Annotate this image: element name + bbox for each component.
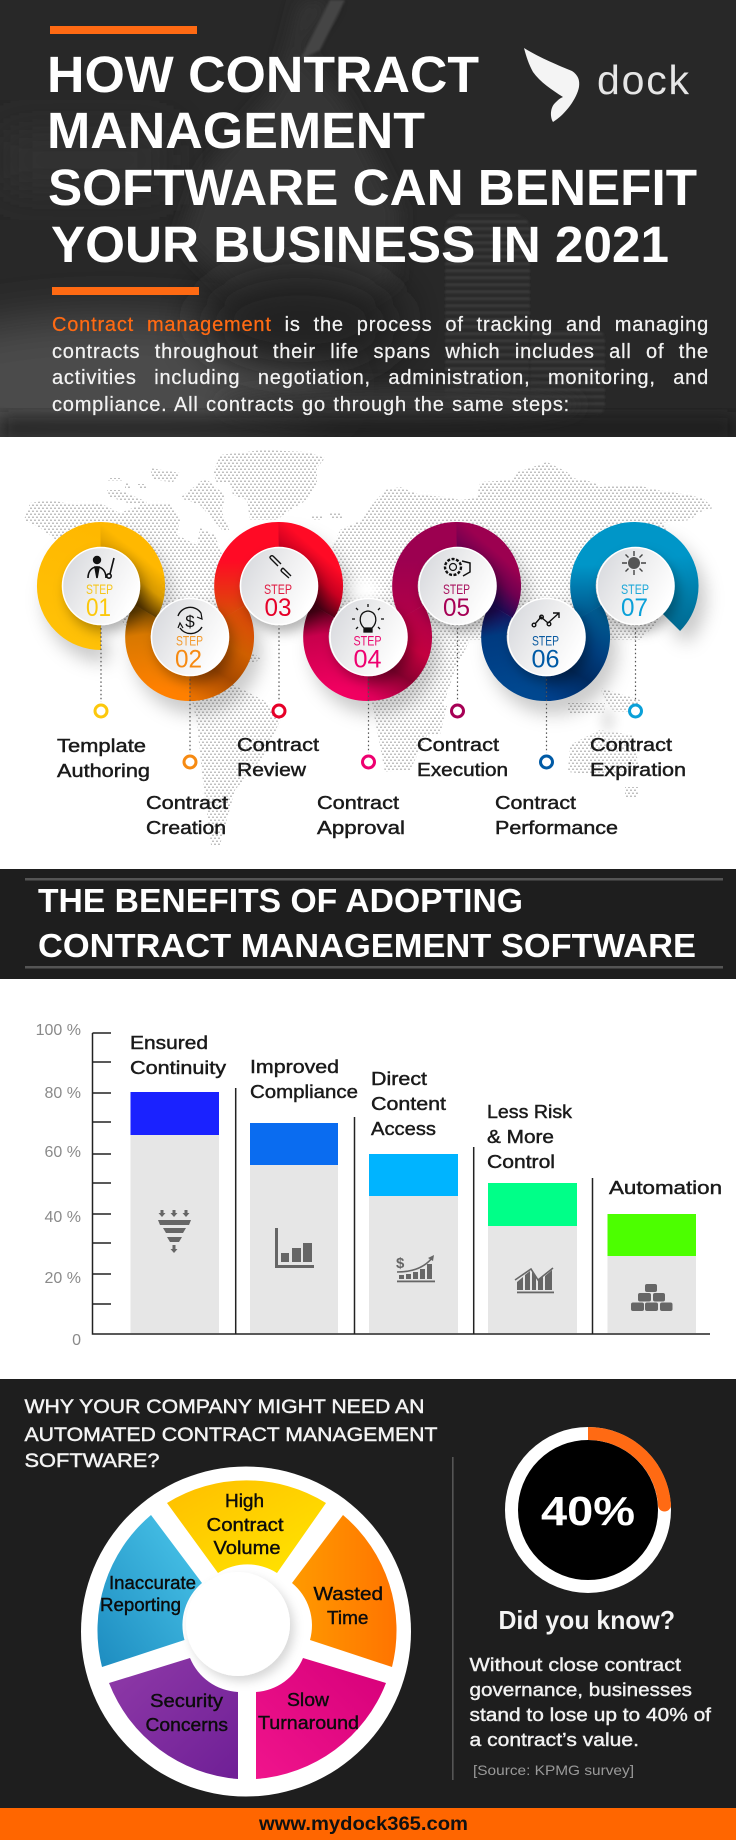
segment: wasted time [292,1515,397,1667]
title: MANAGEMENT [47,102,425,159]
icon: dollar growth: $ [396,1255,405,1272]
intro paragraph: compliance. All contracts go through the same steps: [52,394,570,416]
title: YOUR BUSINESS IN 2021 [51,216,669,273]
bar: ensured continuity: Continuity [130,1057,227,1078]
intro paragraph: Contract management is the process of tracking and managing [52,314,709,336]
step 01: STEP [86,581,113,597]
icon: funnel [158,1210,191,1253]
bar: direct content access: Access [371,1118,436,1139]
axis labels: 40 % [45,1209,81,1226]
step labels: Contract [146,792,228,813]
bar: less risk and more control: & More [487,1126,554,1147]
step 04: 04 [354,646,382,674]
bar: direct content access: Direct [371,1068,427,1089]
intro paragraph [52,314,709,416]
step labels: Authoring [57,760,150,781]
axis labels: 60 % [45,1144,81,1161]
step labels: Execution [417,759,508,780]
axis labels: 80 % [45,1085,81,1102]
did you know text: stand to lose up to 40% of [470,1704,712,1725]
wheel hub [186,1572,290,1676]
segment: inaccurate reporting: Inaccurate [109,1572,196,1593]
step labels: Contract [317,792,399,813]
step 05: STEP [443,581,470,597]
step labels: Contract [417,734,499,755]
step labels: Expiration [590,759,686,780]
bar: direct content access: Content [371,1093,446,1114]
step labels: Creation [146,817,226,838]
segment: slow turnaround: Turnaround [258,1712,359,1733]
background photo: hourglass and coins [0,0,736,455]
heading: WHY YOUR COMPANY MIGHT NEED AN [24,1396,424,1418]
did you know text: a contract’s value. [470,1729,639,1750]
40% gauge: 40% [541,1488,635,1534]
step 02: 02 [175,646,202,674]
heading: AUTOMATED CONTRACT MANAGEMENT [24,1424,438,1446]
step 02 [152,598,228,676]
segment: wasted time: Time [327,1607,368,1628]
footer: website [0,1808,736,1840]
title [47,46,697,273]
bottom accent bar [52,287,199,295]
bar: ensured continuity [130,1032,227,1333]
step labels: Review [237,759,307,780]
step 03: STEP [264,581,292,597]
axis labels [36,1022,81,1349]
bar: improved compliance: Improved [250,1056,339,1077]
step labels: Performance [495,817,618,838]
step 01: 01 [86,594,111,622]
bar: automation [608,1177,722,1333]
40% gauge [512,1433,671,1586]
step 07 [597,548,674,624]
connector end rings [95,705,642,768]
step 05: 05 [443,594,470,622]
bar: direct content access [369,1068,458,1333]
panel: benefits heading [0,869,736,979]
step 06 [508,598,585,676]
title: HOW CONTRACT [47,46,479,103]
steps ribbon [50,535,686,688]
axis and ticks [92,1033,710,1334]
segment: high contract volume: High [225,1490,264,1511]
panel: header [0,0,736,438]
dotted world map [24,450,713,845]
segment: wasted time: Wasted [314,1583,383,1604]
wheel chart [81,1466,411,1796]
icon: bar chart [275,1228,314,1268]
bar: less risk and more control: Less Risk [487,1101,573,1122]
top accent bar [50,26,197,34]
icon: dollar growth [396,1255,435,1282]
did you know text [470,1654,712,1750]
bar: improved compliance [250,1056,358,1333]
step 04: STEP [354,632,382,648]
axis labels: 100 % [36,1022,81,1039]
step 04 [330,598,407,676]
step labels: Contract [237,734,319,755]
segment: security concerns: Concerns [146,1714,228,1735]
step labels [57,734,686,838]
segment: high contract volume [167,1480,326,1573]
segment: high contract volume: Contract [206,1514,284,1535]
bar: improved compliance: Compliance [250,1081,358,1102]
step 07: 07 [621,594,648,622]
bar: ensured continuity: Ensured [130,1032,208,1053]
segment: high contract volume: Volume [214,1537,280,1558]
icon: trend chart [515,1268,554,1293]
segment: slow turnaround: Slow [287,1689,330,1710]
step labels: Approval [317,817,405,838]
heading text: THE BENEFITS OF ADOPTING [38,882,523,919]
step 03 [240,548,318,624]
segment: inaccurate reporting [97,1515,202,1667]
ribbon shadow [57,547,693,701]
step labels: Contract [590,734,672,755]
title: SOFTWARE CAN BENEFIT [48,159,697,216]
segment: security concerns [109,1658,238,1779]
panel: contract steps [0,437,736,869]
step labels: Contract [495,792,576,813]
logo: dock [524,48,690,122]
icon: gold bars [631,1284,672,1311]
heading text: CONTRACT MANAGEMENT SOFTWARE [38,927,696,964]
step 06: STEP [532,632,559,648]
did you know heading: Did you know? [498,1605,675,1635]
bar: less risk and more control [487,1101,577,1333]
segment: security concerns: Security [150,1690,224,1711]
logo: dock: dock [597,57,690,103]
axis labels: 0 [72,1332,81,1349]
heading: SOFTWARE? [24,1450,160,1472]
step labels: Template [57,735,146,756]
step 01 [62,548,140,624]
axis labels: 20 % [45,1270,81,1287]
did you know text: governance, businesses [470,1679,692,1700]
segment: slow turnaround [256,1658,386,1779]
panel: why your company needs software [0,1379,736,1808]
bar: less risk and more control: Control [487,1151,555,1172]
did you know text: Without close contract [470,1654,681,1675]
dotted connectors [101,624,636,753]
step 02: STEP [176,632,203,648]
step 05 [419,548,496,624]
footer: website: www.mydock365.com [258,1814,468,1835]
step 03: 03 [264,594,292,622]
intro paragraph: contracts throughout their life spans which includes all of the [52,341,709,363]
step 02: $ [185,612,195,631]
step 06: 06 [532,646,560,674]
heading [24,1396,438,1472]
heading text [38,882,696,964]
bar: automation: Automation [609,1177,722,1198]
source note: [Source: KPMG survey] [473,1762,634,1778]
segment: inaccurate reporting: Reporting [100,1594,181,1615]
step 07: STEP [621,581,649,597]
intro paragraph: activities including negotiation, administration, monitoring, and [52,367,709,389]
panel: benefits bar chart [0,979,736,1379]
